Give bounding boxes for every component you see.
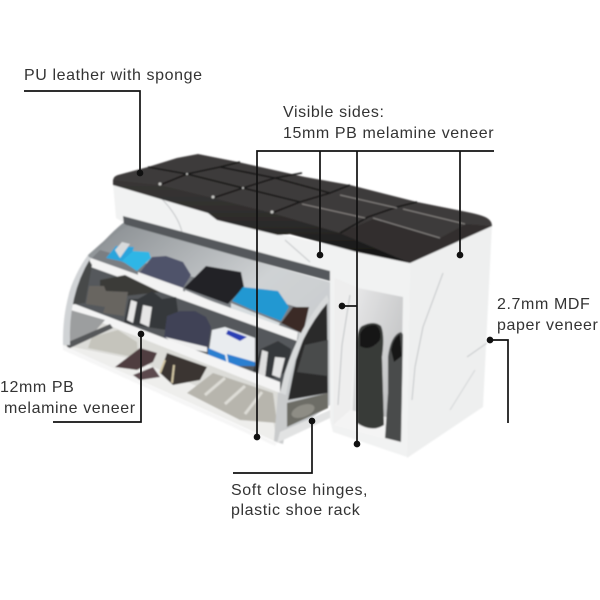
shoe cabinet illustration [63,154,492,458]
heading: PU leather with sponge: PU leather with sponge [24,67,203,84]
leader: hinges [233,418,314,473]
upper shelf [88,257,298,341]
heading: 12mm PB melamine veneer: melamine veneer [4,400,136,417]
seat cushion [113,154,492,263]
top row shoes [106,242,309,334]
leader: 12mm [53,332,144,422]
dark top band of opening [123,216,330,281]
heading: 12mm PB melamine veneer: 12mm PB [0,379,74,396]
leader: visible sides [254,151,494,446]
boots [357,323,384,429]
lower shelf [67,301,280,393]
heading: visible sides: 15mm PB melamine veneer [283,125,494,142]
cabinet right side [407,224,492,458]
heading: soft close hinges: Soft close hinges, [231,482,368,499]
cabinet body front [113,183,410,457]
drawer interior [63,224,330,442]
leader: MDF [488,338,508,423]
heading: soft close hinges: plastic shoe rack [231,502,361,519]
boot compartment [333,278,403,443]
middle row shoes [86,275,291,378]
drawer left arc [63,223,128,349]
bottom row shoes [88,330,277,423]
heading: MDF paper veneer: 2.7mm MDF [497,296,590,313]
heading: MDF paper veneer: paper veneer [497,317,599,334]
drawer right arc [63,295,330,446]
leader: PU leather [24,91,142,176]
marble veins [160,197,487,410]
heading: visible sides: Visible sides: [283,104,384,121]
